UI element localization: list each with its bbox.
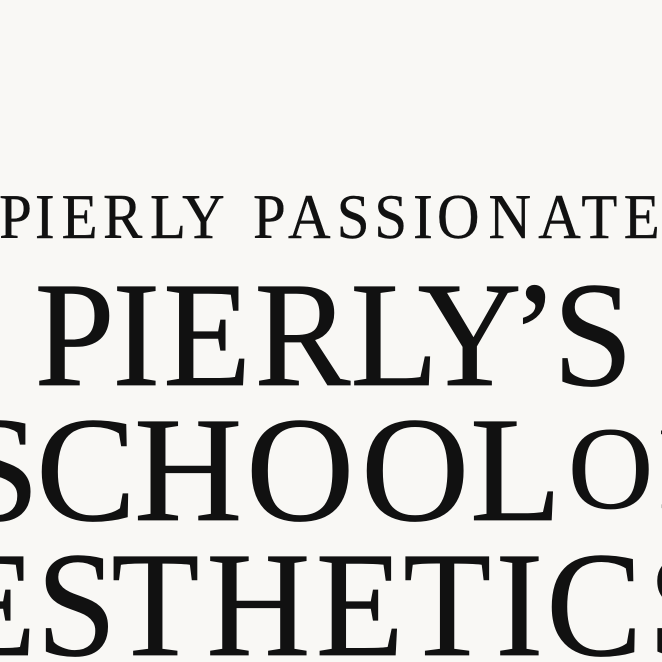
tagline: Pierly Passionate: PIERLY PASSIONATE (0, 182, 660, 253)
title line: Pierly's: PIERLY’S (35, 251, 633, 418)
